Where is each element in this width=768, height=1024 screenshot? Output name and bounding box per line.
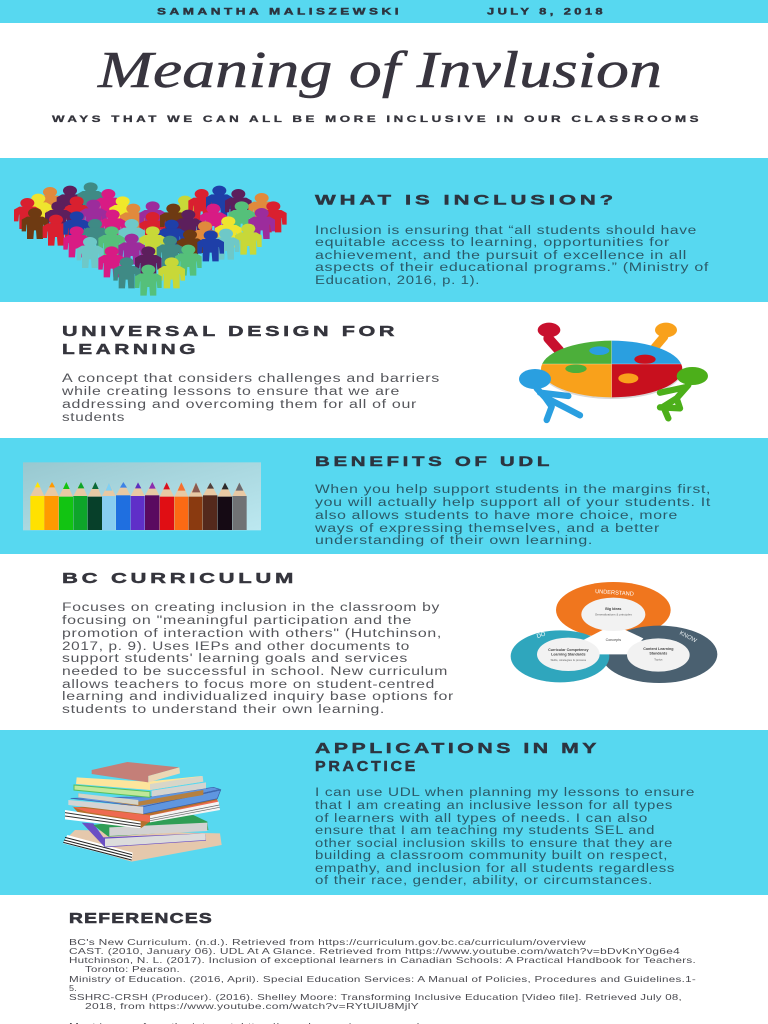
- body text: 2017, p. 9). Uses IEPs and other documents to: [62, 641, 410, 653]
- body text: support students' learning goals and services: [62, 653, 408, 665]
- panel: references: [0, 895, 768, 1024]
- reference list: 5.: [69, 983, 77, 993]
- panel: title: [0, 23, 768, 158]
- body text: of learners with all types of needs. I can also: [315, 813, 648, 825]
- diagram: understand, do, know rings: UNDERSTAND: [595, 589, 634, 598]
- body text: [315, 787, 695, 887]
- panel: benefits of UDL: [0, 438, 768, 554]
- body text: addressing and overcoming them for all of our: [62, 399, 417, 411]
- body text: ways of expressing themselves, and a better: [314, 523, 660, 535]
- panel: author and date bar: [0, 0, 768, 23]
- reference list: BC's New Curriculum. (n.d.). Retrieved from https://curriculum.gov.bc.ca/curriculum/overview: [69, 937, 587, 947]
- body text: Education, 2016, p. 1).: [315, 275, 480, 287]
- diagram: understand, do, know rings: [511, 582, 717, 683]
- body text: A concept that considers challenges and barriers: [62, 373, 440, 385]
- image: coloured pencils: [23, 462, 261, 530]
- body text: When you help support students in the margins first,: [315, 484, 711, 496]
- body text: promotion of interaction with others" (Hutchinson,: [62, 628, 442, 640]
- reference list: Toronto: Pearson.: [85, 964, 180, 974]
- heading: BENEFITS OF UDL: [315, 453, 553, 469]
- body text: that I am creating an inclusive lesson for all types: [315, 800, 673, 812]
- diagram: understand, do, know rings: Big Ideas: [605, 607, 621, 611]
- body text: equitable access to learning, opportunities for: [315, 237, 670, 249]
- diagram: understand, do, know rings: Curricular Competency: [548, 648, 590, 652]
- diagram: understand, do, know rings: KNOW: [678, 630, 698, 645]
- panel: what is inclusion: [0, 158, 768, 302]
- body text: focusing on "meaningful participation and the: [62, 615, 412, 627]
- body text: empathy, and inclusion for all students regardless: [315, 863, 675, 875]
- body text: also allows students to have more choice, more: [315, 510, 678, 522]
- body text: aspects of their educational programs.” (Ministry of: [315, 262, 709, 274]
- reference list: 2018, from https://www.youtube.com/watch?v=RYtUlU8MjlY: [85, 1001, 419, 1011]
- heading: REFERENCES: [69, 910, 213, 927]
- heading: APPLICATIONS IN MY: [315, 740, 600, 757]
- icon: heart of people: [14, 182, 287, 296]
- title: Meaning of Invlusion: [97, 42, 662, 99]
- body text: students: [62, 412, 125, 424]
- reference list: SSHRC-CRSH (Producer). (2016). Shelley Moore: Transforming Inclusive Education [Video file]. Retrieved July 08,: [69, 992, 682, 1002]
- diagram: understand, do, know rings: Content Learning: [643, 647, 673, 651]
- diagram: understand, do, know rings: DO: [536, 631, 547, 640]
- heading: [315, 740, 600, 775]
- heading: BC CURRICULUM: [62, 570, 297, 587]
- heading: [62, 323, 398, 358]
- diagram: understand, do, know rings: Standards: [649, 651, 667, 655]
- body text: achievement, and the pursuit of excellence in all: [315, 250, 687, 262]
- body text: other social inclusion skills to ensure that they are: [315, 838, 673, 850]
- body text: Inclusion is ensuring that “all students should have: [315, 225, 697, 237]
- body text: [61, 373, 440, 424]
- diagram: understand, do, know rings: Skills, strategies & process: [550, 658, 587, 662]
- body text: learning and individualized inquiry base options for: [62, 691, 454, 703]
- body text: [315, 225, 709, 287]
- body text: building a classroom community built on respect,: [315, 850, 668, 862]
- reference list: Ministry of Education. (2016, April). Special Education Services: A Manual of Policies, Procedures and Guidelines.1-: [69, 974, 696, 984]
- date: JULY 8, 2018: [487, 6, 606, 18]
- panel: applications in my practice: [0, 730, 768, 895]
- body text: understanding of their own learning.: [315, 535, 593, 547]
- body text: [314, 484, 711, 547]
- heading: PRACTICE: [315, 758, 418, 775]
- diagram: understand, do, know rings: Generalizations & principles: [595, 613, 632, 617]
- body text: I can use UDL when planning my lessons to ensure: [315, 787, 695, 799]
- reference list: Hutchinson, N. L. (2017). Inclusion of exceptional learners in Canadian Schools: A Practical Handbook for Teachers.: [69, 955, 696, 965]
- icon: people holding puzzle: [519, 323, 708, 420]
- reference list: [69, 937, 696, 1024]
- heading: WHAT IS INCLUSION?: [315, 192, 617, 208]
- author name: SAMANTHA MALISZEWSKI: [157, 6, 402, 18]
- body text: allows teachers to focus more on student-centred: [62, 679, 435, 691]
- diagram: understand, do, know rings: Topics: [654, 657, 663, 661]
- reference list: CAST. (2010, January 06). UDL At A Glance. Retrieved from https://www.youtube.com/watch?v=bDvKnY0g6e4: [69, 946, 680, 956]
- body text: students to understand their own learning.: [62, 704, 385, 716]
- subtitle: WAYS THAT WE CAN ALL BE MORE INCLUSIVE IN OUR CLASSROOMS: [52, 114, 702, 125]
- body text: needed to be successful in school. New curriculum: [62, 666, 448, 678]
- body text: you will actually help support all of your students. It: [315, 497, 711, 509]
- heading: LEARNING: [62, 341, 199, 358]
- body text: Focuses on creating inclusion in the classroom by: [62, 602, 440, 614]
- body text: ensure that I am teaching my students SEL and: [315, 825, 655, 837]
- diagram: understand, do, know rings: Concepts: [606, 638, 621, 642]
- panel: universal design for learning: [62, 322, 708, 424]
- heading: UNIVERSAL DESIGN FOR: [62, 323, 398, 340]
- body text: while creating lessons to ensure that we are: [61, 386, 400, 398]
- diagram: understand, do, know rings: Learning Standards: [551, 652, 586, 656]
- icon: stack of books: [63, 762, 222, 862]
- body text: [62, 602, 454, 716]
- body text: of their race, gender, ability, or circumstances.: [315, 875, 653, 887]
- panel: BC curriculum: [0, 554, 768, 730]
